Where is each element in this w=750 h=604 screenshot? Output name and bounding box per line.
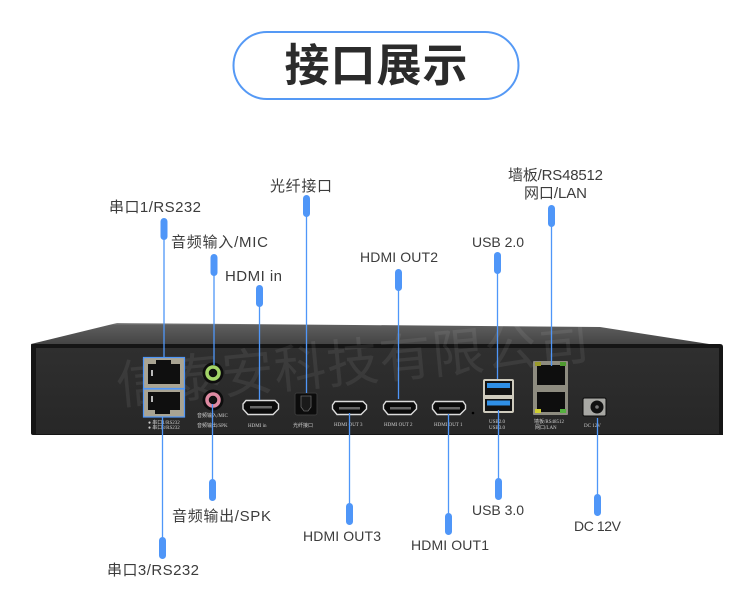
callout: serial 3: 串口3/RS232: [107, 562, 199, 579]
port label: LAN: 墙板/RS48512: [534, 418, 565, 425]
chassis top face: [31, 323, 722, 350]
callout: HDMI out 3: HDMI OUT3: [303, 528, 381, 544]
port label: LAN: 网口/LAN: [535, 425, 557, 431]
port label: HDMI out 2: HDMI OUT 2: [384, 423, 413, 428]
port label: HDMI out 3: HDMI OUT 3: [334, 423, 363, 428]
port label: USB: [489, 420, 505, 431]
callout: audio in: [171, 234, 268, 365]
port: DC jack: [583, 398, 606, 416]
callout: USB 2.0: USB 2.0: [472, 234, 524, 250]
port: green audio jack: [202, 362, 224, 384]
port label: optical: 光纤接口: [293, 422, 313, 429]
callout: HDMI in: [225, 268, 282, 400]
port: serial RJ45 pair: [144, 358, 184, 417]
callout: wall panel / LAN: 墙板/RS48512: [508, 166, 603, 184]
port label: audio: 音频输入/MIC: [197, 412, 229, 419]
port label: USB: USB2.0: [489, 420, 505, 425]
callout: optical: 光纤接口: [270, 178, 332, 195]
chassis front panel: [31, 344, 723, 435]
port: HDMI out 2: [384, 402, 416, 414]
port label: HDMI in: HDMI in: [248, 424, 267, 429]
port label: audio: [197, 412, 229, 429]
callout: audio out: [172, 404, 271, 525]
callout: serial 1: 串口1/RS232: [109, 199, 201, 216]
callout: wall panel / LAN: 网口/LAN: [524, 185, 587, 202]
port: LAN RJ45 pair: [533, 361, 568, 415]
port label: USB: USB3.0: [489, 426, 505, 431]
port label: audio: 音频输出/SPK: [197, 422, 228, 429]
callout: HDMI out 2: HDMI OUT2: [360, 249, 438, 265]
callout: USB 2.0: [472, 234, 524, 379]
port label: LAN: [534, 418, 565, 431]
callout: HDMI in: HDMI in: [225, 268, 282, 285]
callout: HDMI out 2: [360, 249, 438, 399]
callout: audio in: 音频输入/MIC: [171, 234, 268, 251]
port label: serial: [148, 420, 180, 431]
device chassis: [31, 313, 723, 435]
callout: wall panel / LAN: [508, 166, 603, 366]
callout: optical: [270, 178, 332, 393]
port label: HDMI out 1: HDMI OUT 1: [434, 423, 463, 428]
title: 接口展示: [284, 40, 468, 91]
port: pink audio jack: [202, 390, 224, 410]
port label: serial: ● 串口3/RS232: [148, 425, 180, 431]
callout: DC 12V: [574, 418, 622, 534]
callout: DC 12V: DC 12V: [574, 518, 622, 534]
port: optical: [295, 393, 317, 415]
callout: HDMI out 1: [411, 414, 489, 553]
port label: DC: DC 12V: [584, 424, 601, 429]
port: USB stack: [483, 379, 514, 413]
callout: USB 3.0: USB 3.0: [472, 502, 524, 518]
callout: serial 3: [107, 417, 199, 579]
port: HDMI out 3: [332, 402, 366, 414]
callout: USB 3.0: [472, 410, 524, 518]
watermark: 信泰安科技有限公司: [114, 313, 592, 416]
callout: serial 1: [109, 199, 201, 358]
title pill: [234, 32, 518, 99]
callout: HDMI out 3: [303, 413, 381, 544]
callout: HDMI out 1: HDMI OUT1: [411, 537, 489, 553]
port: HDMI out 1: [432, 402, 466, 414]
port: HDMI in: [243, 400, 278, 414]
callout: audio out: 音频输出/SPK: [172, 508, 271, 525]
port label: serial: ● 串口1/RS232: [148, 420, 180, 426]
